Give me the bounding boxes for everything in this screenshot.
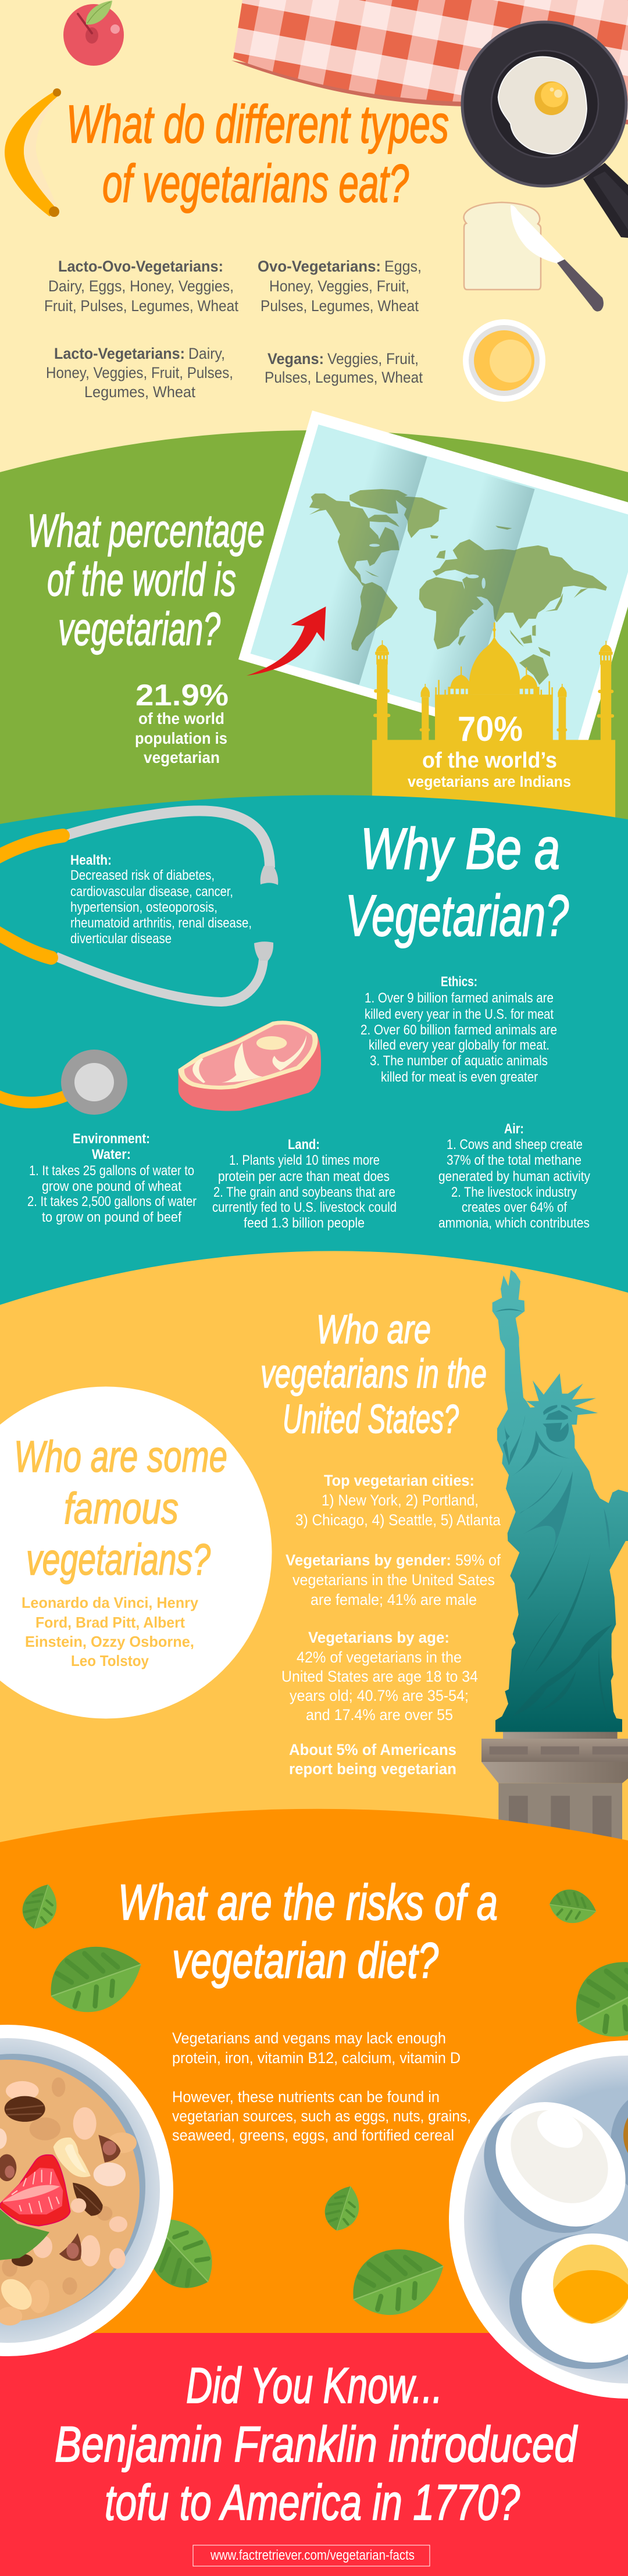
text: top vegetarian cities xyxy=(295,1472,501,1529)
text: top vegetarian cities: 1) New York, 2) Portland, xyxy=(322,1492,479,1509)
text: famous names: Einstein, Ozzy Osborne, xyxy=(25,1633,194,1650)
heading: who are some famous vegetarians: famous xyxy=(64,1484,179,1533)
heading: what do different types of vegetarians eat: What do different types xyxy=(66,95,449,154)
text: ethics: 1. Over 9 billion farmed animals are xyxy=(365,990,554,1006)
text: land xyxy=(212,1137,397,1231)
panel: what percentage of the world is vegetarian xyxy=(0,411,628,837)
text: air: Air: xyxy=(504,1121,524,1137)
text: vegans xyxy=(265,350,423,386)
text: risks description: protein, iron, vitamin B12, calcium, vitamin D xyxy=(172,2049,461,2067)
source link box xyxy=(193,2545,430,2566)
text: ethics: 2. Over 60 billion farmed animals are xyxy=(361,1022,557,1038)
text: lacto-vegetarians: Legumes, Wheat xyxy=(84,383,195,401)
text: lacto-ovo-vegetarians: Dairy, Eggs, Honey, Veggies, xyxy=(48,277,234,295)
heading: what are the risks of a vegetarian diet: vegetarian diet? xyxy=(172,1933,438,1989)
text: ethics: Ethics: xyxy=(441,974,477,990)
heading: what percentage of the world is vegetarian: vegetarian? xyxy=(58,603,220,655)
text: air: ammonia, which contributes xyxy=(438,1215,590,1231)
heading: what percentage of the world is vegetarian: What percentage xyxy=(27,505,265,556)
text: health: Decreased risk of diabetes, xyxy=(70,868,215,883)
icon: statue of liberty xyxy=(481,1269,628,1842)
text: environment water: to grow on pound of beef xyxy=(42,1209,181,1225)
panel: why be a vegetarian xyxy=(0,795,628,1314)
text: vegetarians by age: and 17.4% are over 55 xyxy=(306,1706,453,1724)
heading: did you know benjamin franklin: Did You Know... xyxy=(186,2358,443,2414)
text: lacto-vegetarians: Dairy, xyxy=(188,345,225,362)
panel: what do different types of vegetarians eat xyxy=(0,0,628,483)
heading: what are the risks of a vegetarian diet: What are the risks of a xyxy=(118,1875,498,1931)
icon: frying pan with egg xyxy=(462,22,628,238)
text: famous names xyxy=(22,1594,199,1669)
heading: what are the risks of a vegetarian diet xyxy=(118,1875,498,1989)
text: risks description xyxy=(172,2029,471,2144)
text: lacto-vegetarians: Lacto-Vegetarians: xyxy=(54,345,185,362)
text: air: 1. Cows and sheep create xyxy=(447,1137,583,1153)
text: vegetarians by age xyxy=(281,1629,478,1724)
icon: banana xyxy=(5,88,61,217)
text: vegetarians by gender: Vegetarians by gender: xyxy=(286,1551,451,1569)
text: air xyxy=(438,1121,590,1231)
text: ethics: killed every year in the U.S. for meat xyxy=(365,1007,554,1022)
heading: what percentage of the world is vegetarian xyxy=(27,505,265,655)
text: vegetarians by gender xyxy=(286,1551,501,1608)
text: health: hypertension, osteoporosis, xyxy=(70,900,217,915)
text: land: protein per acre than meat does xyxy=(218,1169,390,1184)
icon: steak xyxy=(179,1021,321,1111)
strawberry xyxy=(0,2155,70,2226)
text: vegetarians by age: Vegetarians by age: xyxy=(308,1629,449,1646)
world map xyxy=(238,411,628,759)
stat: 21.9 percent: of the world xyxy=(138,709,224,727)
stat: 70 percent xyxy=(408,709,571,790)
heading: what do different types of vegetarians eat: of vegetarians eat? xyxy=(102,154,409,213)
heading: who are some famous vegetarians xyxy=(14,1432,227,1585)
text: about 5 percent of americans: About 5% of Americans xyxy=(289,1741,456,1758)
picnic cloth xyxy=(231,0,628,124)
panel: did you know xyxy=(0,2333,628,2576)
text: environment water: Environment: xyxy=(73,1131,150,1147)
panel: what are the risks of a vegetarian diet xyxy=(0,1809,628,2338)
heading: who are vegetarians in the united states: Who are xyxy=(316,1307,431,1352)
arrow xyxy=(247,606,326,676)
text: land: 2. The grain and soybeans that are xyxy=(213,1184,395,1200)
icon: stethoscope xyxy=(0,811,278,1115)
heading: why be a vegetarian: Why Be a xyxy=(361,816,560,882)
icon: apple xyxy=(63,1,124,66)
text: about 5 percent of americans: report being vegetarian xyxy=(289,1760,456,1778)
panel: famous vegetarians circle xyxy=(0,1386,272,1719)
text: lacto-ovo-vegetarians: Lacto-Ovo-Vegetarians: xyxy=(58,258,223,275)
text: health: rheumatoid arthritis, renal disease, xyxy=(70,915,252,931)
text: lacto-ovo-vegetarians xyxy=(44,258,238,315)
text: vegans: Vegans: xyxy=(267,350,324,368)
text: environment water: Water: xyxy=(92,1147,131,1162)
text: lacto-vegetarians: Honey, Veggies, Fruit, Pulses, xyxy=(46,364,233,381)
text: ovo-vegetarians: Pulses, Legumes, Wheat xyxy=(261,297,419,315)
text: famous names: Leo Tolstoy xyxy=(71,1652,149,1669)
stat: 21.9 percent: population is xyxy=(135,729,227,747)
text: about 5 percent of americans xyxy=(289,1741,456,1778)
text: land: 1. Plants yield 10 times more xyxy=(229,1153,380,1168)
text: land: feed 1.3 billion people xyxy=(244,1215,365,1231)
text: environment water: grow one pound of wheat xyxy=(42,1179,181,1194)
heading: what do different types of vegetarians eat xyxy=(66,95,449,213)
text: ethics: 3. The number of aquatic animals xyxy=(370,1053,548,1069)
text: famous names: Leonardo da Vinci, Henry xyxy=(22,1594,199,1611)
heading: who are some famous vegetarians: vegetarians? xyxy=(26,1535,211,1585)
heading: who are vegetarians in the united states xyxy=(261,1307,487,1442)
text: risks description: vegetarian sources, such as eggs, nuts, grains, xyxy=(172,2107,471,2125)
panel: who are vegetarians in the united states xyxy=(0,1251,628,1861)
text: vegetarians by gender: are female; 41% are male xyxy=(311,1591,477,1608)
heading: who are vegetarians in the united states: vegetarians in the xyxy=(261,1351,487,1396)
text: environment water: 1. It takes 25 gallons of water to xyxy=(29,1163,194,1179)
text: environment water xyxy=(27,1131,197,1225)
text: ovo-vegetarians: Ovo-Vegetarians: xyxy=(258,258,381,275)
icon: bowl of egg yolk xyxy=(463,319,545,402)
stat: 70 percent: 70% xyxy=(458,709,523,748)
text: health: Health: xyxy=(70,852,112,868)
text: vegetarians by gender: vegetarians in the United Sates xyxy=(292,1571,495,1589)
text: ethics: killed every year globally for meat. xyxy=(369,1037,550,1053)
heading: who are vegetarians in the united states: United States? xyxy=(283,1396,459,1442)
heading: did you know benjamin franklin xyxy=(55,2358,579,2531)
stat: 21.9 percent xyxy=(135,679,229,766)
leaves xyxy=(17,1879,628,2328)
stat: 21.9 percent: 21.9% xyxy=(135,679,229,712)
text: air: creates over 64% of xyxy=(462,1200,567,1215)
text: ovo-vegetarians: Honey, Veggies, Fruit, xyxy=(269,277,409,295)
stat: 70 percent: vegetarians are Indians xyxy=(408,773,571,790)
text: vegans: Veggies, Fruit, xyxy=(327,350,419,368)
text: environment water: 2. It takes 2,500 gallons of water xyxy=(27,1194,197,1209)
heading: why be a vegetarian xyxy=(345,816,569,948)
text: top vegetarian cities: 3) Chicago, 4) Seattle, 5) Atlanta xyxy=(295,1511,501,1529)
heading: what percentage of the world is vegetarian: of the world is xyxy=(47,554,236,605)
text: risks description: seaweed, greens, eggs, and fortified cereal xyxy=(172,2127,454,2144)
text: vegetarians by age: years old; 40.7% are 35-54; xyxy=(290,1687,469,1704)
text: ovo-vegetarians xyxy=(258,258,422,315)
basil leaf on oatmeal xyxy=(0,2209,49,2260)
text: risks description: However, these nutrients can be found in xyxy=(172,2088,440,2106)
source link box: www.factretriever.com/vegetarian-facts xyxy=(210,2548,415,2563)
text: vegetarians by gender: 59% of xyxy=(455,1551,501,1569)
text: ethics xyxy=(361,974,557,1085)
text: vegetarians by age: 42% of vegetarians in the xyxy=(297,1649,462,1666)
text: land: Land: xyxy=(288,1137,320,1153)
stat: 21.9 percent: vegetarian xyxy=(144,748,220,766)
text: lacto-ovo-vegetarians: Fruit, Pulses, Legumes, Wheat xyxy=(44,297,238,315)
text: ethics: killed for meat is even greater xyxy=(381,1069,538,1085)
text: ovo-vegetarians: Eggs, xyxy=(384,258,422,275)
icon: toast and knife xyxy=(464,202,604,312)
text: air: generated by human activity xyxy=(438,1169,590,1184)
text: vegans: Pulses, Legumes, Wheat xyxy=(265,369,423,386)
text: health: cardiovascular disease, cancer, xyxy=(70,884,233,900)
icon: plate of boiled eggs xyxy=(449,2040,628,2399)
text: top vegetarian cities: Top vegetarian cities: xyxy=(324,1472,474,1489)
text: vegetarians by age: United States are age 18 to 34 xyxy=(281,1668,478,1685)
text: risks description: Vegetarians and vegans may lack enough xyxy=(172,2029,446,2047)
text: health xyxy=(70,852,252,947)
stat: 70 percent: of the world’s xyxy=(422,748,557,773)
text: famous names: Ford, Brad Pitt, Albert xyxy=(35,1614,185,1631)
text: air: 2. The livestock industry xyxy=(451,1184,577,1200)
text: land: currently fed to U.S. livestock could xyxy=(212,1200,397,1215)
text: lacto-vegetarians xyxy=(46,345,233,401)
text: health: diverticular disease xyxy=(70,931,172,947)
icon: taj mahal xyxy=(372,622,615,820)
icon: bowl of oatmeal xyxy=(0,2025,173,2356)
text: air: 37% of the total methane xyxy=(447,1153,581,1168)
heading: who are some famous vegetarians: Who are some xyxy=(14,1432,227,1482)
